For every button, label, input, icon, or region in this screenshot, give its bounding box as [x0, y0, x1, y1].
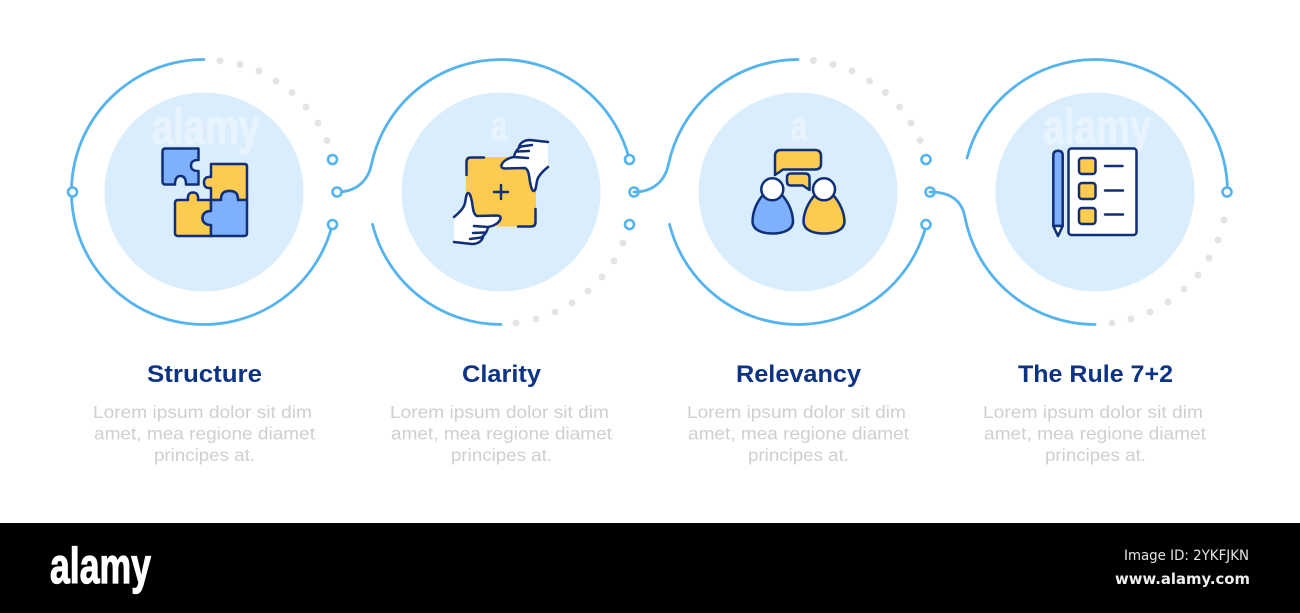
description: relevancy: Lorem ipsum dolor sit dim: [687, 402, 906, 422]
description: structure: Lorem ipsum dolor sit dim: [93, 402, 312, 422]
icon: two people talking: [752, 150, 844, 234]
icon: framing hands: [454, 140, 548, 244]
watermark: the rule 7+2: alamy: [1043, 99, 1151, 155]
logo: alamy: alamy: [50, 538, 151, 594]
description: clarity: principes at.: [451, 445, 552, 465]
panel: structure: [68, 57, 337, 465]
panel: relevancy: [634, 57, 934, 465]
description: the rule 7+2: principes at.: [1045, 445, 1146, 465]
ring arc: structure: [71, 59, 332, 324]
panel: clarity: [332, 60, 638, 465]
image id: Image ID: 2YKFJKN: [1124, 548, 1249, 564]
description: relevancy: amet, mea regione diamet: [688, 424, 909, 444]
background circle: clarity: [402, 92, 600, 292]
description: clarity: [390, 402, 612, 465]
background circle: relevancy: [698, 92, 898, 292]
description: relevancy: [687, 402, 909, 465]
description: structure: amet, mea regione diamet: [94, 424, 315, 444]
heading: clarity: Clarity: [462, 361, 542, 388]
ring arcs: clarity: [337, 60, 629, 324]
description: structure: [93, 402, 315, 465]
node: the rule 7+2: [1222, 188, 1232, 196]
description: the rule 7+2: Lorem ipsum dolor sit dim: [983, 402, 1203, 422]
nodes: relevancy: [922, 155, 934, 229]
description: the rule 7+2: amet, mea regione diamet: [984, 424, 1206, 444]
footer bar: [0, 523, 1300, 613]
description: structure: principes at.: [154, 445, 255, 465]
top hand: [501, 140, 548, 191]
watermark: clarity: a: [491, 102, 507, 149]
heading: the rule 7+2: The Rule 7+2: [1018, 361, 1173, 388]
heading: relevancy: Relevancy: [736, 361, 862, 388]
dotted arc: the rule 7+2: [1108, 216, 1228, 326]
background circle: structure: [104, 92, 304, 292]
ring arcs: the rule 7+2: [930, 60, 1228, 324]
ring arcs: relevancy: [634, 60, 926, 324]
description: relevancy: principes at.: [748, 445, 849, 465]
dotted arc: relevancy: [810, 57, 924, 144]
icon: pencil and checklist: [1053, 148, 1136, 236]
nodes: clarity: [332, 155, 638, 229]
dotted arc: structure: [216, 57, 330, 144]
description: clarity: Lorem ipsum dolor sit dim: [390, 402, 609, 422]
description: clarity: amet, mea regione diamet: [391, 424, 612, 444]
watermark: relevancy: a: [791, 102, 807, 149]
watermark: structure: alamy: [152, 99, 260, 155]
panel: the rule 7+2: [930, 60, 1232, 465]
icon: puzzle: [162, 148, 247, 236]
bottom hand: [454, 193, 501, 244]
nodes: structure: [68, 155, 337, 229]
dotted arc: clarity: [512, 240, 626, 326]
description: the rule 7+2: [983, 402, 1206, 465]
website: www.alamy.com: [1115, 570, 1250, 588]
heading: structure: Structure: [147, 361, 262, 388]
background circle: the rule 7+2: [996, 92, 1194, 292]
